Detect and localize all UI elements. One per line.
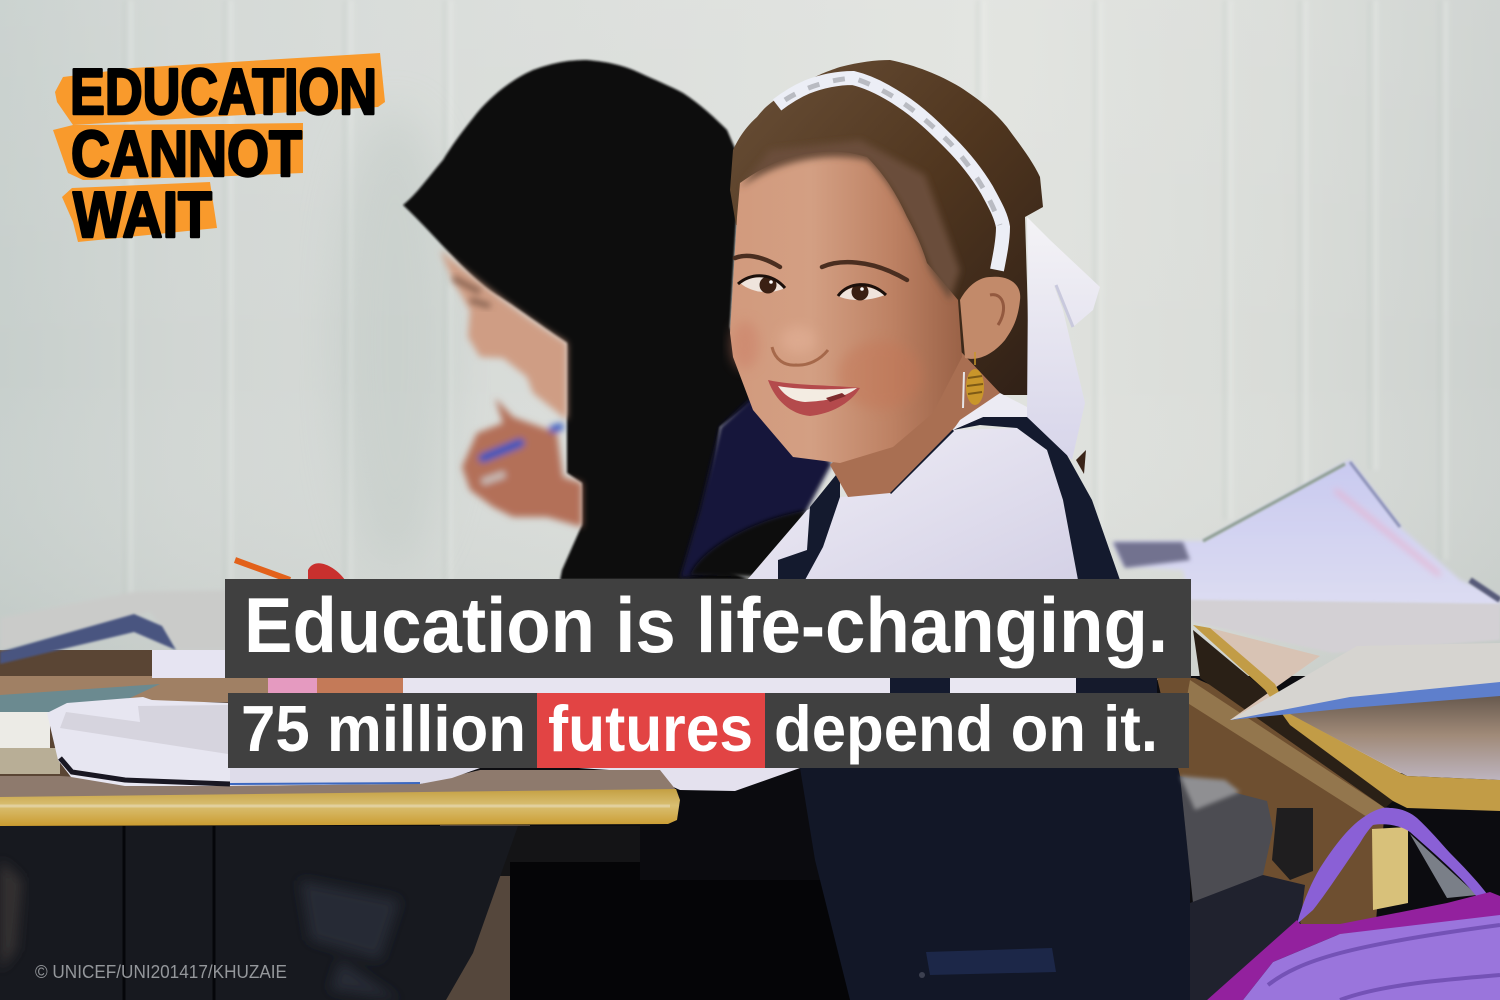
front girl: neck and collar: [830, 340, 1027, 497]
forehead hairline shading: [740, 140, 960, 300]
subheading banner: futures: [548, 692, 753, 765]
big open book: [1113, 460, 1500, 606]
front girl: pinafore lower body: [800, 676, 1190, 1000]
blurred girl in black hijab: [403, 60, 832, 580]
logo brush strokes: [53, 53, 385, 242]
magenta band: [1207, 892, 1500, 1000]
eyebrows: [735, 256, 907, 280]
grey cloth on chair: [1180, 776, 1273, 903]
flat page: [1190, 600, 1500, 653]
subheading banner: [228, 692, 1189, 768]
grey strap: [1410, 834, 1477, 898]
nose: [772, 347, 828, 365]
hijab: [403, 60, 755, 580]
sleeve cuff below banner: [548, 760, 800, 791]
logo: Education Cannot Wait: [53, 53, 385, 251]
left desk: spiral notebook: [47, 697, 480, 786]
desk surface: [1193, 625, 1500, 780]
eyes: [740, 277, 785, 292]
sleeve strip between banners: [403, 676, 893, 695]
left desk: table top and yellow edge: [0, 770, 680, 826]
photo credit: © UNICEF/UNI201417/KHUZAIE: [35, 962, 287, 982]
dark desk front, floor and lower shadow: [0, 780, 860, 1000]
cheek blush: [838, 341, 922, 409]
earring: [963, 352, 984, 408]
handle: [1297, 808, 1487, 924]
navy tunic: [680, 397, 832, 578]
right desk with open books: [1113, 460, 1500, 1000]
logo wordmark: [70, 55, 377, 251]
pencil and eraser behind banner: [235, 560, 345, 580]
lavender body: [1243, 915, 1500, 1000]
subheading banner: depend on it.: [774, 692, 1158, 765]
wooden post: [1372, 827, 1408, 910]
pink and skin strip between banners: [268, 678, 318, 693]
subheading banner: 75 million: [241, 692, 526, 765]
left desk: surface, blurred books and side panel: [0, 590, 403, 780]
logo wordmark: WAIT: [73, 178, 212, 251]
logo wordmark: CANNOT: [71, 117, 302, 190]
front girl: ribbon: [1027, 217, 1100, 474]
wall: white corrugated panels: [0, 0, 1500, 680]
blurred face: [440, 250, 567, 420]
logo wordmark: EDUCATION: [70, 55, 377, 128]
headline banner: Education is life-changing.: [244, 581, 1168, 669]
near open book: [1230, 643, 1500, 720]
blurred hand and pen: [462, 398, 582, 527]
front girl: shirt, straps and sleeve: [403, 417, 1120, 791]
purple backpack: [1207, 808, 1500, 1000]
front girl: hair: [730, 60, 1043, 400]
front girl: face: [730, 140, 1020, 463]
ear: [960, 277, 1020, 359]
highlight: futures: [537, 693, 765, 768]
front girl: headband: [777, 78, 1003, 270]
desk side and dark base: [1157, 676, 1500, 1000]
smile: [768, 380, 860, 416]
